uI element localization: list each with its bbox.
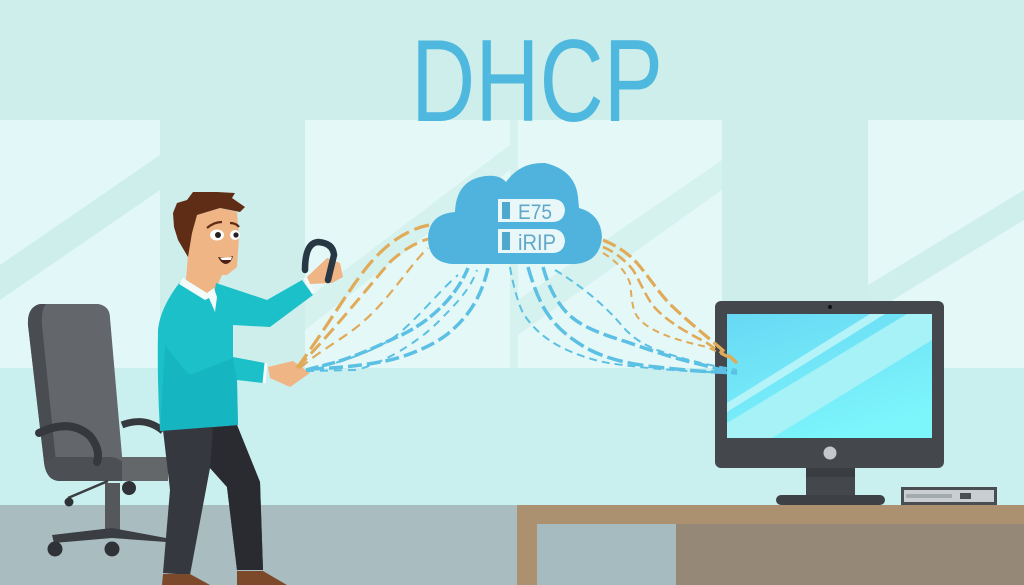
windows [0,120,1024,368]
hand lower [268,361,310,387]
office chair [28,304,168,556]
desk [517,505,1024,585]
label: iRIP [498,229,565,255]
neck [186,255,222,298]
cloud [428,163,602,264]
dashed links: left [297,225,488,371]
hand upper with grip [307,258,343,284]
eyes and mouth [207,222,240,264]
trousers [163,425,263,575]
hair [173,192,245,257]
sweater [158,280,313,431]
shoes [162,574,210,585]
network box [901,487,997,505]
collar and tie [179,278,217,312]
cuffs [264,278,313,383]
label: iRIP: iRIP [518,230,556,255]
head [184,208,239,275]
label: E75 [498,199,565,224]
label: E75: E75 [518,201,552,224]
monitor [715,301,944,505]
floor [0,505,1024,585]
dashed links: right [510,240,737,373]
title: DHCP [411,15,663,146]
icon: hand grip [305,242,334,280]
person [158,192,343,585]
